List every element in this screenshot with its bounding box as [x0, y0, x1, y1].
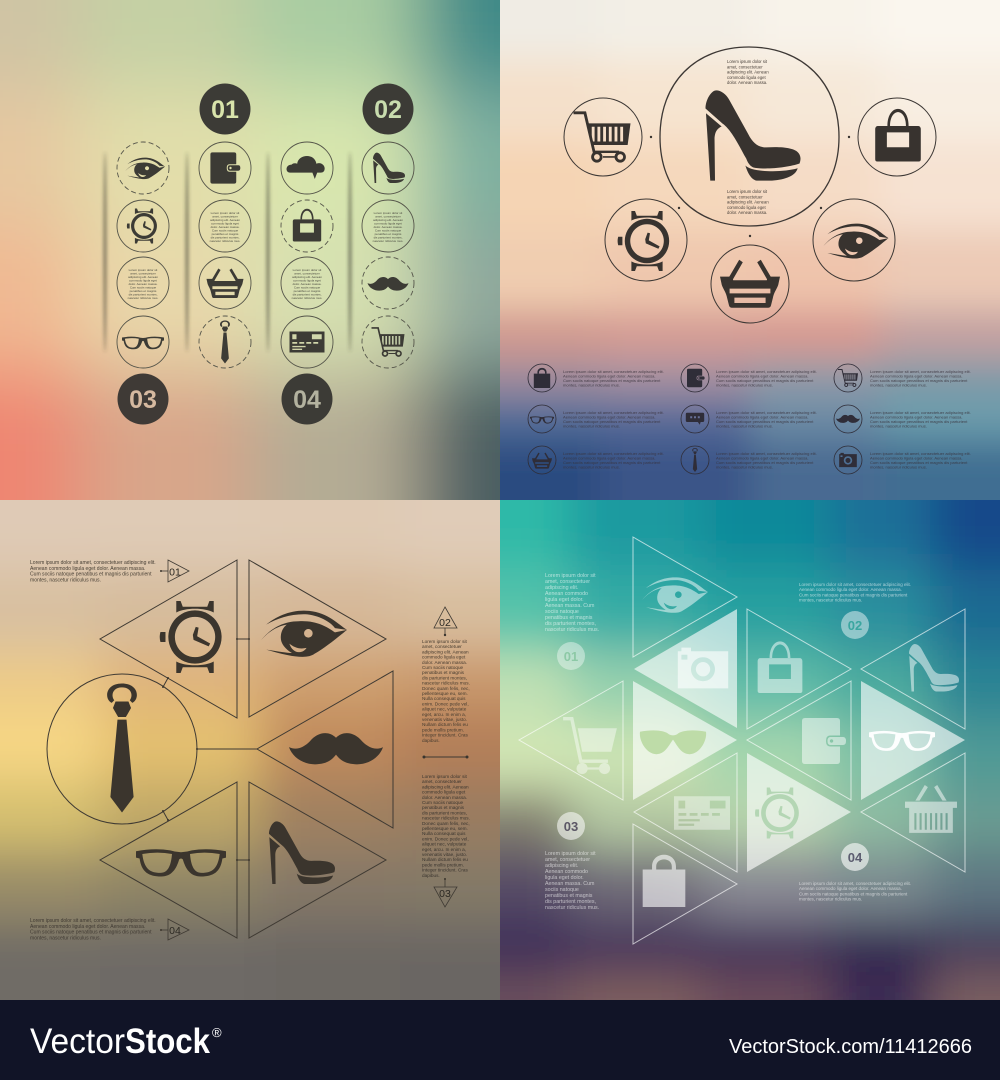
text captions: ligula eget dolor. [545, 597, 584, 603]
text: right column: Cum sociis natoque [422, 665, 464, 670]
text: right column: dis parturient montes, [422, 675, 467, 680]
list paragraphs: Lorem ipsum dolor sit amet, consectetuer adipiscing elit. [563, 369, 664, 374]
number badges: 04 [293, 386, 321, 414]
text: right column: penatibus et magnis [422, 670, 465, 675]
text: right column: dolor. Aenean massa. [422, 660, 467, 665]
text: left captions: montes, nascetur ridiculus mus. [30, 935, 101, 941]
text: right column: Lorem ipsum dolor sit [422, 774, 468, 779]
text: circle paragraphs: dis parturient montes, [374, 236, 403, 240]
list paragraphs: Aenean commodo ligula eget dolor. Aenean massa. [716, 374, 808, 378]
step numbers: 02 [439, 617, 451, 629]
list paragraphs: Cum sociis natoque penatibus et magnis dis parturient [716, 419, 814, 424]
text: circle paragraphs: nascetur ridiculus mus. [292, 296, 323, 300]
list paragraphs: Lorem ipsum dolor sit amet, consectetuer adipiscing elit. [716, 451, 817, 456]
background: green and salmon blur [0, 0, 500, 500]
footer bar: Vector [30, 1022, 125, 1061]
filled triangles [633, 609, 965, 872]
text: circle paragraphs: amet, consectetuer [375, 214, 401, 218]
text: circle paragraphs: dis parturient montes, [211, 236, 240, 240]
text: right column: Nulla consequat quis [422, 831, 466, 836]
text: circle paragraphs: dolor. Aenean massa. [129, 282, 158, 286]
text captions: montes, nascetur ridiculus mus. [799, 897, 862, 902]
text: right column: Donec quam felis, nec, [422, 686, 470, 691]
list paragraphs: Cum sociis natoque penatibus et magnis dis parturient [870, 378, 968, 383]
text: circle paragraphs [128, 211, 404, 300]
icons in triangles [107, 601, 383, 884]
list paragraphs: Cum sociis natoque penatibus et magnis dis parturient [563, 419, 661, 424]
list paragraphs: Lorem ipsum dolor sit amet, consectetuer adipiscing elit. [563, 410, 664, 415]
text: right column: enim. Donec pede vel, [422, 836, 469, 841]
text: right column: Nullam dictum felis eu [422, 857, 468, 862]
central blob with heel: amet, consectetuer [727, 194, 763, 199]
list paragraphs [563, 369, 971, 470]
step markers [161, 560, 467, 940]
footer bar: ® [212, 1025, 222, 1040]
text: right column: aliquet nec, vulputate [422, 707, 467, 712]
text captions: montes, nascetur ridiculus mus. [799, 598, 862, 603]
list paragraphs: montes, nascetur ridiculus mus. [716, 382, 773, 388]
text captions [545, 573, 911, 911]
icon circles [117, 142, 414, 368]
text: circle paragraphs: dis parturient montes, [293, 292, 322, 296]
text captions: dis parturient montes, [545, 621, 596, 627]
number badges: 01 [564, 649, 578, 664]
text: right column: eget, arcu. In enim a, [422, 712, 466, 717]
text: right column: dapibus. [422, 738, 440, 743]
text: circle paragraphs: nascetur ridiculus mus. [128, 296, 159, 300]
text: circle paragraphs: amet, consectetuer [294, 272, 320, 276]
text captions: sociis natoque [545, 609, 579, 615]
text: right column: amet, consectetuer [422, 644, 462, 649]
text: right column [422, 639, 470, 878]
text: right column: amet, consectetuer [422, 779, 462, 784]
text: left captions: Cum sociis natoque penatibus et magnis dis parturient [30, 930, 152, 936]
text: circle paragraphs: Lorem ipsum dolor sit [211, 211, 240, 215]
text: right column: Integer tincidunt. Cras [422, 733, 469, 738]
panel: top-right radial diagram [500, 0, 1000, 500]
text captions: sociis natoque [545, 887, 579, 893]
number badges [557, 611, 869, 871]
list paragraphs: Lorem ipsum dolor sit amet, consectetuer adipiscing elit. [563, 451, 664, 456]
text: right column: Cum sociis natoque [422, 800, 464, 805]
text captions: Aenean massa. Cum [545, 881, 595, 887]
central blob with heel: Lorem ipsum dolor sit [727, 189, 768, 194]
central blob with heel: amet, consectetuer [727, 64, 763, 69]
text captions: Lorem ipsum dolor sit amet, consectetuer adipiscing elit. [799, 582, 911, 587]
text: right column: pellentesque eu, sem. [422, 691, 468, 696]
list paragraphs: Lorem ipsum dolor sit amet, consectetuer adipiscing elit. [870, 369, 971, 374]
text: circle paragraphs: Cum sociis natoque [212, 228, 238, 232]
central blob with heel: Lorem ipsum dolor sit [727, 59, 768, 64]
text captions: Aenean commodo ligula eget dolor. Aenean massa. [799, 886, 902, 891]
text: right column: commodo ligula eget [422, 655, 466, 660]
list paragraphs: Cum sociis natoque penatibus et magnis dis parturient [563, 460, 661, 465]
list paragraphs: Aenean commodo ligula eget dolor. Aenean massa. [870, 414, 962, 420]
text: right column: Nulla consequat quis [422, 696, 466, 701]
column shadows [104, 152, 352, 352]
text captions: Aenean commodo [545, 869, 588, 875]
step numbers: 04 [169, 925, 181, 937]
text captions: ligula eget dolor. [545, 875, 584, 881]
text: left captions: montes, nascetur ridiculus mus. [30, 577, 101, 583]
text: circle paragraphs: Lorem ipsum dolor sit [374, 211, 402, 215]
text: left captions: Aenean commodo ligula eget dolor. Aenean massa. [30, 566, 145, 572]
text: right column: dapibus. [422, 873, 440, 878]
central blob with heel: adipiscing elit. Aenean [727, 70, 769, 75]
number badges [118, 84, 414, 424]
text captions: Lorem ipsum dolor sit amet, consectetuer adipiscing elit. [799, 881, 911, 886]
text: circle paragraphs: penatibus et magnis [294, 289, 321, 293]
step numbers: 01 [169, 566, 181, 578]
text: right column: Donec quam felis, nec, [422, 821, 470, 826]
text: right column: nascetur ridiculus mus. [422, 681, 470, 686]
text: circle paragraphs: amet, consectetuer [212, 214, 238, 218]
list paragraphs: Aenean commodo ligula eget dolor. Aenean massa. [716, 414, 808, 420]
text: circle paragraphs: dis parturient montes, [129, 292, 158, 296]
central blob with heel: dolor. Aenean massa. [727, 80, 767, 85]
step numbers: 03 [439, 888, 451, 900]
text: right column: commodo ligula eget [422, 790, 466, 795]
icons on triangles [563, 577, 959, 907]
text: right column: aliquet nec, vulputate [422, 842, 467, 847]
list paragraphs: Aenean commodo ligula eget dolor. Aenean massa. [870, 374, 962, 378]
text: right column: Nullam dictum felis eu [422, 722, 468, 727]
outlined triangles [519, 537, 965, 944]
list paragraphs: Lorem ipsum dolor sit amet, consectetuer adipiscing elit. [716, 369, 817, 374]
text: circle paragraphs: penatibus et magnis [375, 232, 402, 236]
text: circle paragraphs: nascetur ridiculus mus. [210, 239, 241, 243]
text captions: penatibus et magnis [545, 615, 593, 621]
list paragraphs: Cum sociis natoque penatibus et magnis dis parturient [716, 378, 814, 383]
text: right column: pede mollis pretium. [422, 862, 464, 867]
text captions: nascetur ridiculus mus. [545, 627, 599, 633]
text: circle paragraphs: commodo ligula eget [293, 278, 321, 282]
text: circle paragraphs: dolor. Aenean massa. [374, 225, 403, 229]
panel: bottom-right light triangles [500, 500, 1000, 1000]
text: circle paragraphs: commodo ligula eget [211, 222, 239, 226]
list paragraphs: Cum sociis natoque penatibus et magnis dis parturient [870, 419, 968, 424]
text: right column: venenatis vitae, justo. [422, 717, 467, 722]
panel: bottom-left triangle diagram [0, 500, 500, 1000]
text: circle paragraphs: Cum sociis natoque [130, 286, 156, 290]
central blob with heel [660, 47, 839, 226]
list paragraphs: Cum sociis natoque penatibus et magnis dis parturient [563, 378, 661, 383]
list paragraphs: montes, nascetur ridiculus mus. [716, 464, 773, 470]
text captions: Aenean commodo [545, 591, 588, 597]
footer bar [0, 1000, 1000, 1080]
list paragraphs: montes, nascetur ridiculus mus. [870, 464, 927, 470]
text: circle paragraphs: Cum sociis natoque [375, 228, 401, 232]
text captions: adipiscing elit. [545, 585, 578, 591]
text: right column: Integer tincidunt. Cras [422, 868, 469, 873]
list paragraphs: Aenean commodo ligula eget dolor. Aenean massa. [563, 456, 655, 460]
text: right column: eget, arcu. In enim a, [422, 847, 466, 852]
text: circle paragraphs: nascetur ridiculus mus. [373, 239, 404, 243]
text: right column: dis parturient montes, [422, 810, 467, 815]
triangle outlines and connectors [47, 560, 393, 938]
text: circle paragraphs: penatibus et magnis [212, 232, 239, 236]
text captions: Cum sociis natoque penatibus et magnis dis parturient [799, 592, 908, 597]
text: left captions: Cum sociis natoque penatibus et magnis dis parturient [30, 572, 152, 578]
text: circle paragraphs: commodo ligula eget [374, 222, 402, 226]
background: peach to blue blur [500, 0, 1000, 500]
list paragraphs: Aenean commodo ligula eget dolor. Aenean massa. [716, 456, 808, 460]
list paragraphs: Aenean commodo ligula eget dolor. Aenean massa. [870, 456, 962, 460]
text captions: Aenean massa. Cum [545, 603, 595, 609]
text: right column: pellentesque eu, sem. [422, 826, 468, 831]
list paragraphs: Cum sociis natoque penatibus et magnis dis parturient [716, 460, 814, 465]
text: circle paragraphs: penatibus et magnis [130, 289, 157, 293]
text: right column: penatibus et magnis [422, 805, 465, 810]
icons grid [122, 152, 408, 364]
list paragraphs: montes, nascetur ridiculus mus. [716, 424, 773, 428]
icon list [528, 364, 862, 474]
text: right column: venenatis vitae, justo. [422, 852, 467, 857]
text: right column: nascetur ridiculus mus. [422, 816, 470, 821]
text: right column: pede mollis pretium. [422, 727, 464, 732]
text captions: Lorem ipsum dolor sit [545, 573, 596, 579]
list paragraphs: Lorem ipsum dolor sit amet, consectetuer adipiscing elit. [870, 451, 971, 456]
text: circle paragraphs: Lorem ipsum dolor sit [129, 268, 158, 272]
central blob with heel: commodo ligula eget [727, 205, 766, 210]
panel: top-left circle grid [0, 0, 500, 500]
text: circle paragraphs: adipiscing elit. Aenean [292, 275, 322, 279]
text: circle paragraphs: adipiscing elit. Aenean [128, 275, 158, 279]
number badges: 04 [848, 850, 863, 865]
text: circle paragraphs: adipiscing elit. Aenean [373, 218, 403, 222]
list paragraphs: montes, nascetur ridiculus mus. [563, 464, 620, 470]
list paragraphs: montes, nascetur ridiculus mus. [563, 382, 620, 388]
background: tan and amber blur [0, 500, 500, 1000]
text captions: amet, consectetuer [545, 579, 590, 585]
text: left captions [30, 560, 156, 941]
text: right column: adipiscing elit. Aenean [422, 784, 469, 789]
list paragraphs: Aenean commodo ligula eget dolor. Aenean massa. [563, 414, 655, 420]
text: circle paragraphs: dolor. Aenean massa. [211, 225, 240, 229]
text: right column: enim. Donec pede vel, [422, 701, 469, 706]
text: circle paragraphs: amet, consectetuer [130, 272, 156, 276]
text: circle paragraphs: dolor. Aenean massa. [293, 282, 322, 286]
text captions: penatibus et magnis [545, 893, 593, 899]
text: left captions: Lorem ipsum dolor sit amet, consectetuer adipiscing elit. [30, 918, 156, 924]
background: teal and purple blur [500, 500, 1000, 1000]
text captions: Cum sociis natoque penatibus et magnis dis parturient [799, 891, 908, 896]
list paragraphs: Lorem ipsum dolor sit amet, consectetuer adipiscing elit. [716, 410, 817, 415]
text: right column: dolor. Aenean massa. [422, 795, 467, 800]
number badges: 02 [374, 96, 402, 124]
number badges: 03 [564, 819, 578, 834]
text: circle paragraphs: Lorem ipsum dolor sit [293, 268, 322, 272]
step numbers [169, 566, 451, 937]
text captions: amet, consectetuer [545, 857, 590, 863]
text: circle paragraphs: Cum sociis natoque [294, 286, 320, 290]
text: circle paragraphs: commodo ligula eget [129, 278, 157, 282]
footer bar: VectorStock.com/11412666 [729, 1036, 972, 1058]
text captions: Lorem ipsum dolor sit [545, 851, 596, 857]
text: right column: adipiscing elit. Aenean [422, 649, 469, 654]
text: circle paragraphs: adipiscing elit. Aenean [210, 218, 240, 222]
central blob with heel: dolor. Aenean massa. [727, 210, 767, 215]
satellite icons [564, 98, 936, 323]
list paragraphs: Lorem ipsum dolor sit amet, consectetuer adipiscing elit. [870, 410, 971, 415]
number badges: 02 [848, 618, 862, 633]
list paragraphs: Cum sociis natoque penatibus et magnis dis parturient [870, 460, 968, 465]
connector dots [160, 570, 468, 931]
list paragraphs: montes, nascetur ridiculus mus. [870, 382, 927, 388]
list paragraphs: Aenean commodo ligula eget dolor. Aenean massa. [563, 374, 655, 378]
text: left captions: Lorem ipsum dolor sit amet, consectetuer adipiscing elit. [30, 560, 156, 566]
central blob with heel: adipiscing elit. Aenean [727, 200, 769, 205]
text captions: nascetur ridiculus mus. [545, 905, 599, 911]
text captions: Aenean commodo ligula eget dolor. Aenean massa. [799, 587, 902, 592]
text captions: adipiscing elit. [545, 863, 578, 869]
central blob with heel: commodo ligula eget [727, 75, 766, 80]
list paragraphs: montes, nascetur ridiculus mus. [563, 424, 620, 428]
text: right column: Lorem ipsum dolor sit [422, 639, 468, 644]
list paragraphs: montes, nascetur ridiculus mus. [870, 424, 927, 428]
text: left captions: Aenean commodo ligula eget dolor. Aenean massa. [30, 924, 145, 930]
number badges: 01 [211, 96, 239, 124]
footer bar: Stock [125, 1022, 210, 1061]
number badges: 03 [129, 386, 157, 414]
text captions: dis parturient montes, [545, 899, 596, 905]
